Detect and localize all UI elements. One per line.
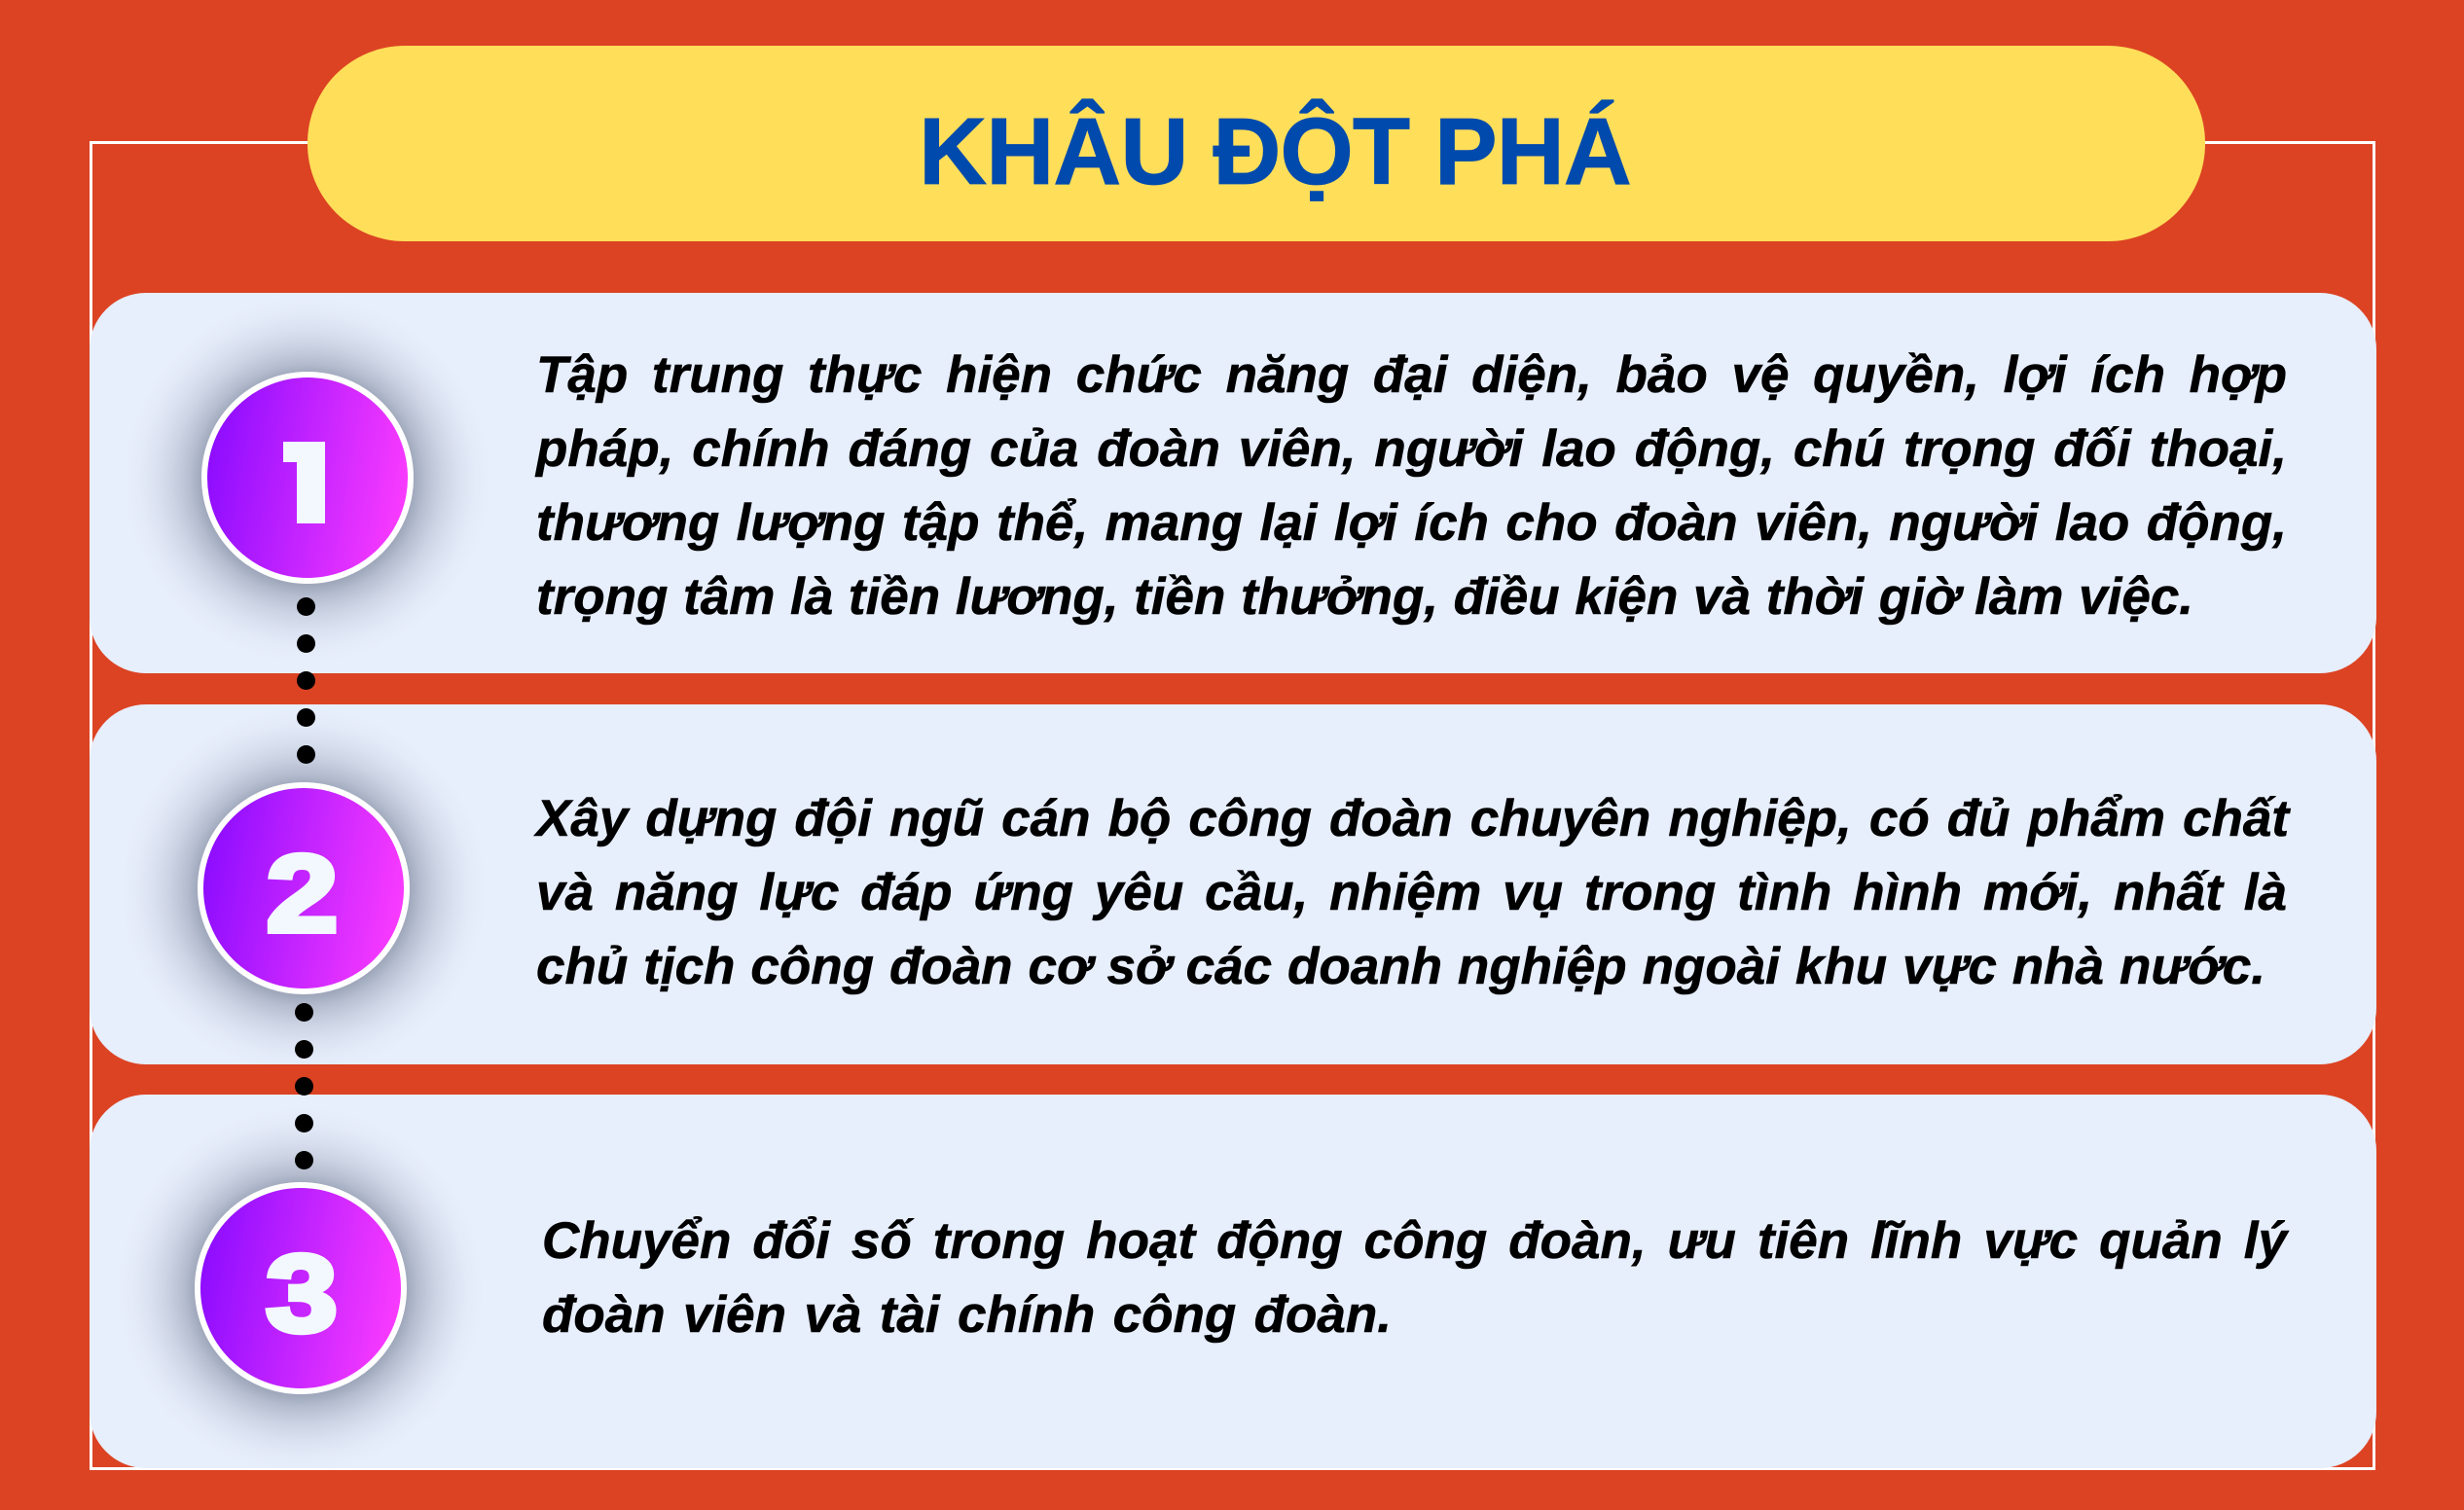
text block 3 [542,1212,2290,1344]
circle 1 [201,372,414,584]
text block 1: trọng tâm là tiền lương, tiền thưởng, điều kiện và thời giờ làm việc. [536,568,2193,626]
dotted connector 2-3 [295,1003,313,1169]
text block 2: Xây dựng đội ngũ cán bộ công đoàn chuyên nghiệp, có đủ phẩm chất [536,790,2289,847]
circle glow 1 [125,297,490,663]
text block 3: Chuyển đổi số trong hoạt động công đoàn, ưu tiên lĩnh vực quản lý [542,1212,2287,1270]
panel 3 [90,1095,2376,1468]
number 3: 3 [266,1233,338,1354]
text block 2: và năng lực đáp ứng yêu cầu, nhiệm vụ trong tình hình mới, nhất là [536,864,2287,921]
circle glow 3 [118,1107,484,1473]
circle 3 [195,1182,407,1394]
title: KHÂU ĐỘT PHÁ [919,98,1631,204]
number 1: 1 [272,413,336,543]
text block 1: thương lượng tập thể, mang lại lợi ích cho đoàn viên, người lao động, [536,494,2287,552]
circle glow 2 [121,707,487,1073]
panel 1 [90,293,2376,673]
text block 1: Tập trung thực hiện chức năng đại diện, bảo vệ quyền, lợi ích hợp [536,346,2287,404]
number 2: 2 [267,833,338,954]
text block 1: pháp, chính đáng của đoàn viên, người lao động, chú trọng đối thoại, [536,420,2287,478]
text block 2: chủ tịch công đoàn cơ sở các doanh nghiệp ngoài khu vực nhà nước. [536,938,2265,995]
text block 2 [533,790,2291,995]
text block 3: đoàn viên và tài chính công đoàn. [542,1286,1392,1344]
title pill [308,46,2205,241]
dotted connector 1-2 [297,597,315,764]
text block 1 [535,346,2287,626]
panel 2 [90,704,2376,1064]
circle 2 [198,782,410,994]
